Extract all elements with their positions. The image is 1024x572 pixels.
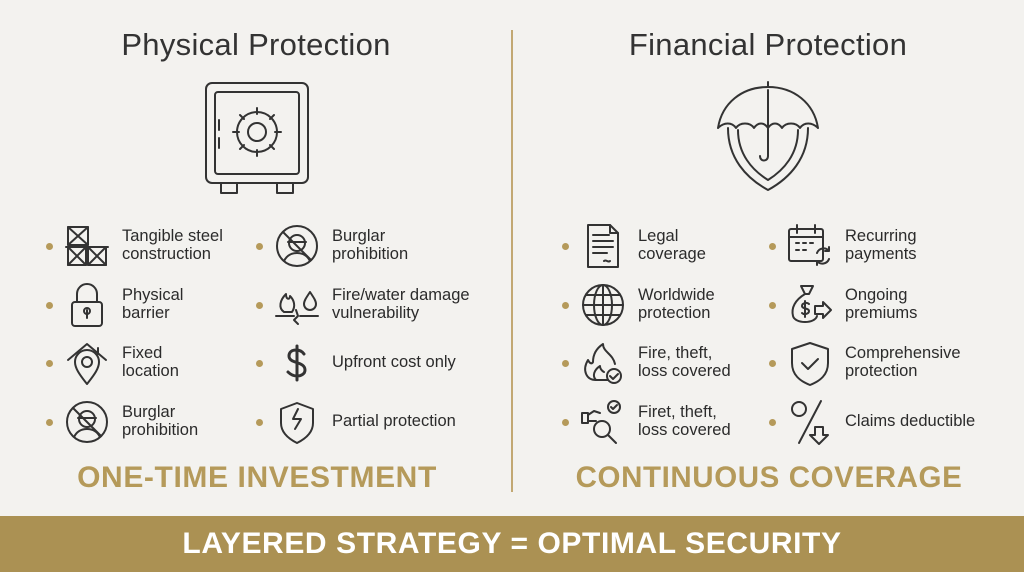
item: recurring payments: Recurring: [845, 227, 917, 245]
item: fire theft loss: [562, 343, 731, 384]
item: burglar prohibition: [46, 401, 198, 443]
item: fire/water: Fire/water damage: [332, 286, 470, 304]
item: partial protection: [256, 402, 456, 444]
icon: umbrella shield: [717, 81, 819, 191]
item: tangible steel: [46, 226, 223, 266]
bottom banner: LAYERED STRATEGY = OPTIMAL SECURITY: [182, 527, 842, 560]
item: comprehensive: protection: [845, 362, 917, 380]
item: ongoing premiums: [769, 285, 917, 323]
item: tangible steel: Tangible steel: [122, 227, 223, 245]
item: firet theft: [562, 400, 731, 444]
heading: one-time investment: ONE-TIME INVESTMENT: [77, 461, 437, 494]
item: claims deductible: Claims deductible: [845, 412, 975, 430]
item: recurring payments: payments: [845, 245, 917, 263]
item: burglar prohibition 2: [256, 225, 408, 267]
item: legal coverage: coverage: [638, 245, 706, 263]
item: worldwide: protection: [638, 304, 710, 322]
divider: [511, 30, 513, 492]
item: ongoing premiums: Ongoing: [845, 286, 907, 304]
item: fire/water: vulnerability: [332, 304, 419, 322]
item: fixed location: location: [122, 362, 179, 380]
heading: continuous coverage: CONTINUOUS COVERAGE: [576, 461, 962, 494]
item: upfront cost: [256, 344, 456, 382]
item: tangible steel: construction: [122, 245, 211, 263]
title: financial protection: Financial Protection: [629, 27, 907, 62]
item: burglar prohibition 2: Burglar: [332, 227, 385, 245]
item: claims deductible: [769, 400, 975, 445]
item: physical barrier: [46, 283, 183, 327]
item: burglar prohibition: Burglar: [122, 403, 175, 421]
item: physical barrier: Physical: [122, 286, 183, 304]
item: burglar prohibition 2: prohibition: [332, 245, 408, 263]
item: firet theft: Firet, theft,: [638, 403, 717, 421]
item: partial protection: Partial protection: [332, 412, 456, 430]
item: fixed location: Fixed: [122, 344, 162, 362]
item: comprehensive: [769, 342, 961, 386]
item: legal coverage: Legal: [638, 227, 678, 245]
item: fire theft loss: Fire, theft,: [638, 344, 712, 362]
bottom banner: [0, 516, 1024, 572]
item: worldwide: [562, 284, 715, 326]
item: fire theft loss: loss covered: [638, 362, 731, 380]
item: legal coverage: [562, 224, 706, 268]
item: upfront cost: Upfront cost only: [332, 353, 456, 371]
item: firet theft: loss covered: [638, 421, 731, 439]
item: recurring payments: [769, 224, 917, 266]
item: physical barrier: barrier: [122, 304, 170, 322]
item: fire/water: [256, 286, 470, 325]
title: physical protection: Physical Protection: [121, 27, 391, 62]
item: comprehensive: Comprehensive: [845, 344, 961, 362]
item: fixed location: [46, 343, 179, 385]
item: worldwide: Worldwide: [638, 286, 715, 304]
item: ongoing premiums: premiums: [845, 304, 917, 322]
icon: safe: [205, 82, 309, 194]
item: burglar prohibition: prohibition: [122, 421, 198, 439]
